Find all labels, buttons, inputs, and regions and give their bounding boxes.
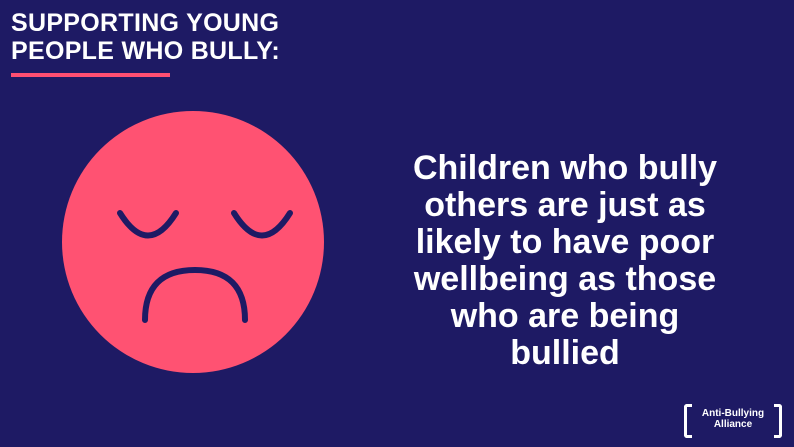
main statement: wellbeing as those <box>414 260 716 298</box>
main statement <box>413 149 717 372</box>
title: PEOPLE WHO BULLY: <box>11 37 280 65</box>
main statement: Children who bully <box>413 149 717 187</box>
logo <box>684 404 782 438</box>
main statement: who are being <box>451 297 679 335</box>
main statement: bullied <box>510 334 620 372</box>
logo: Alliance <box>714 419 752 430</box>
title <box>11 9 280 65</box>
title: SUPPORTING YOUNG <box>11 9 279 37</box>
icon: sad face <box>62 111 324 373</box>
title underline <box>11 73 170 77</box>
main statement: others are just as <box>424 186 706 224</box>
main statement: likely to have poor <box>416 223 714 261</box>
logo: Anti-Bullying <box>702 408 764 419</box>
